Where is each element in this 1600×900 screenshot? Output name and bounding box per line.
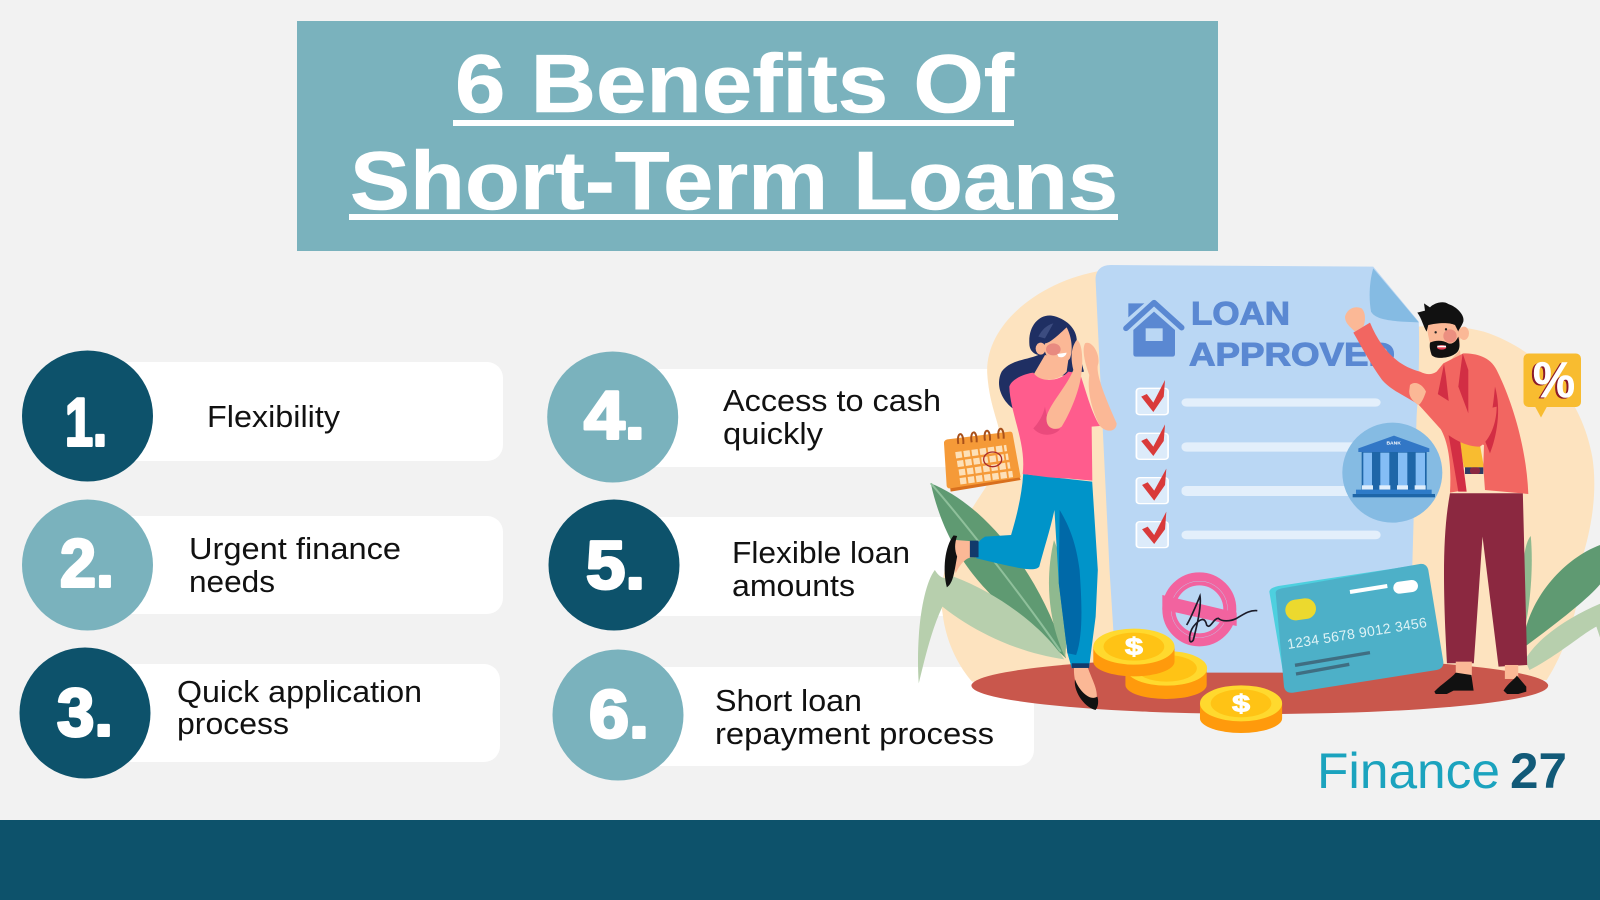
coin: front right [1200,685,1282,733]
title banner: 6 Benefits Of [455,37,1014,130]
title banner: Short-Term Loans [350,134,1118,227]
coin: back [1125,651,1207,699]
benefit 3: Quick application process: process [177,706,289,741]
benefit 4: Access to cash quickly: Access to cash [723,383,941,418]
title banner [297,21,1218,251]
benefit 2: Urgent finance needs: needs [189,564,275,599]
benefit 2: Urgent finance needs [22,500,503,630]
background blob [941,271,1594,682]
benefit 4: Access to cash quickly [547,352,1034,482]
icon: calendar [944,429,1021,492]
woman [945,315,1117,710]
checklist [1136,380,1381,548]
benefit 3: Quick application process: 3. [57,674,113,750]
benefit 1: Flexibility: 1. [65,384,107,460]
coins [1093,629,1282,733]
benefit 1: Flexibility [22,350,503,482]
heading: loan approved: APPROVED [1189,336,1395,372]
benefit 2: Urgent finance needs: Urgent finance [189,531,401,566]
icon: bank [1342,423,1442,523]
logo: Finance 27: 27 [1510,743,1567,799]
benefit 6: Short loan repayment process [552,650,1034,780]
logo: Finance 27: Finance [1317,743,1500,799]
benefit 2: Urgent finance needs: 2. [60,526,114,602]
credit card [1269,564,1443,693]
loan document [1096,265,1442,673]
plants [918,483,1600,683]
icon: percent tag [1524,352,1581,418]
benefit 1: Flexibility: Flexibility [207,399,341,434]
benefit 6: Short loan repayment process: 6. [589,676,649,752]
benefit 5: Flexible loan amounts: amounts [732,568,855,603]
stamp with signature [1162,577,1257,642]
icon: percent tag: % [1531,353,1573,409]
page fold [1370,268,1419,322]
benefit 6: Short loan repayment process: repayment process [715,716,994,751]
benefit 4: Access to cash quickly: 4. [584,378,645,454]
benefit 6: Short loan repayment process: Short loan [715,683,862,718]
benefit 5: Flexible loan amounts [548,500,1034,630]
benefit 5: Flexible loan amounts: Flexible loan [732,535,910,570]
benefit 3: Quick application process: Quick application [177,674,422,709]
man [1345,302,1528,694]
ground ellipse [971,657,1548,714]
benefit 5: Flexible loan amounts: 5. [586,528,645,604]
credit card: 1234 5678 9012 3456 [1286,614,1428,652]
benefit 4: Access to cash quickly: quickly [723,416,824,451]
footer band [0,820,1600,900]
coin: front left: $ [1125,634,1143,661]
illustration: loan approved scene [918,265,1600,733]
heading: loan approved [1189,296,1395,372]
heading: loan approved: LOAN [1191,296,1290,332]
coin: front right: $ [1232,690,1250,717]
coin: front left [1093,629,1175,676]
icon: house [1126,303,1182,357]
icon: bank: BANK [1386,440,1401,446]
icon: percent tag: % [1533,352,1575,408]
benefit 3: Quick application process [20,648,500,778]
